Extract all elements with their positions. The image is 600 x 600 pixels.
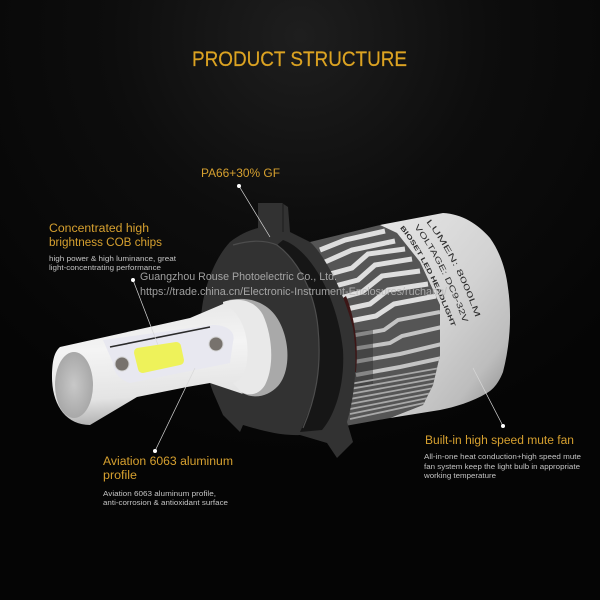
label: mute fan: working temperature [423, 473, 496, 480]
label: aluminum profile: Aviation 6063 aluminum profile, [103, 491, 216, 498]
label: COB chips [49, 223, 176, 272]
label: mute fan: All-in-one heat conduction+high speed mute [424, 454, 581, 461]
curved label text on housing [400, 219, 480, 326]
central shadowed fins [350, 312, 442, 375]
label: aluminum profile: anti-corrosion & antioxidant surface [103, 500, 228, 507]
label: aluminum profile: Aviation 6063 aluminum [103, 456, 233, 468]
label: COB chips: Concentrated high [49, 223, 149, 235]
label: aluminum profile [103, 456, 233, 507]
stem flange [223, 300, 271, 394]
left screw [115, 357, 129, 371]
curved label text on housing: LUMEN: 8000LM [426, 219, 480, 316]
label: mute fan: fan system keep the light bulb in appropriate [424, 464, 580, 471]
label: aluminum profile: profile [103, 470, 137, 482]
infographic canvas [50, 0, 581, 505]
white cylinder housing [380, 213, 510, 418]
collar inner edge [233, 241, 319, 428]
front end lens [55, 352, 93, 418]
curved label text on housing: VOLTAGE: DC9-32V [416, 224, 468, 321]
dark collar silhouette [201, 203, 355, 458]
COB chip [134, 342, 184, 373]
leader line: chips [131, 278, 158, 345]
collar dark band [277, 240, 343, 432]
panel slot [110, 327, 210, 347]
label: COB chips: brightness COB chips [49, 237, 162, 249]
stem flange shadow side [223, 299, 287, 396]
heat sink fins [310, 225, 440, 426]
watermark: https://trade.china.cn/Electronic-Instrument-Enclosures/ruchang/ [140, 286, 448, 298]
chip panel [103, 325, 234, 383]
leader line: collar [237, 184, 270, 237]
red reflection on rim [343, 296, 357, 372]
label: mute fan: Built-in high speed mute fan [425, 435, 574, 447]
watermark [140, 271, 448, 298]
title: PRODUCT STRUCTURE [192, 48, 407, 71]
leader line: fan [473, 368, 505, 428]
label: COB chips: light-concentrating performance [49, 265, 161, 272]
label: PA66: PA66+30% GF [201, 168, 280, 180]
label: mute fan [423, 435, 581, 480]
label: COB chips: high power & high luminance, great [49, 256, 176, 263]
stem body [52, 304, 248, 425]
watermark: Guangzhou Rouse Photoelectric Co., Ltd. [140, 271, 337, 283]
leader line: aluminum [153, 368, 195, 453]
LED bulb illustration [52, 203, 510, 458]
lower fine fins [350, 368, 440, 419]
collar top tab edge [282, 204, 284, 232]
curved label text on housing: BIOSET LED HEADLIGHT [400, 226, 456, 326]
right screw [209, 337, 223, 351]
